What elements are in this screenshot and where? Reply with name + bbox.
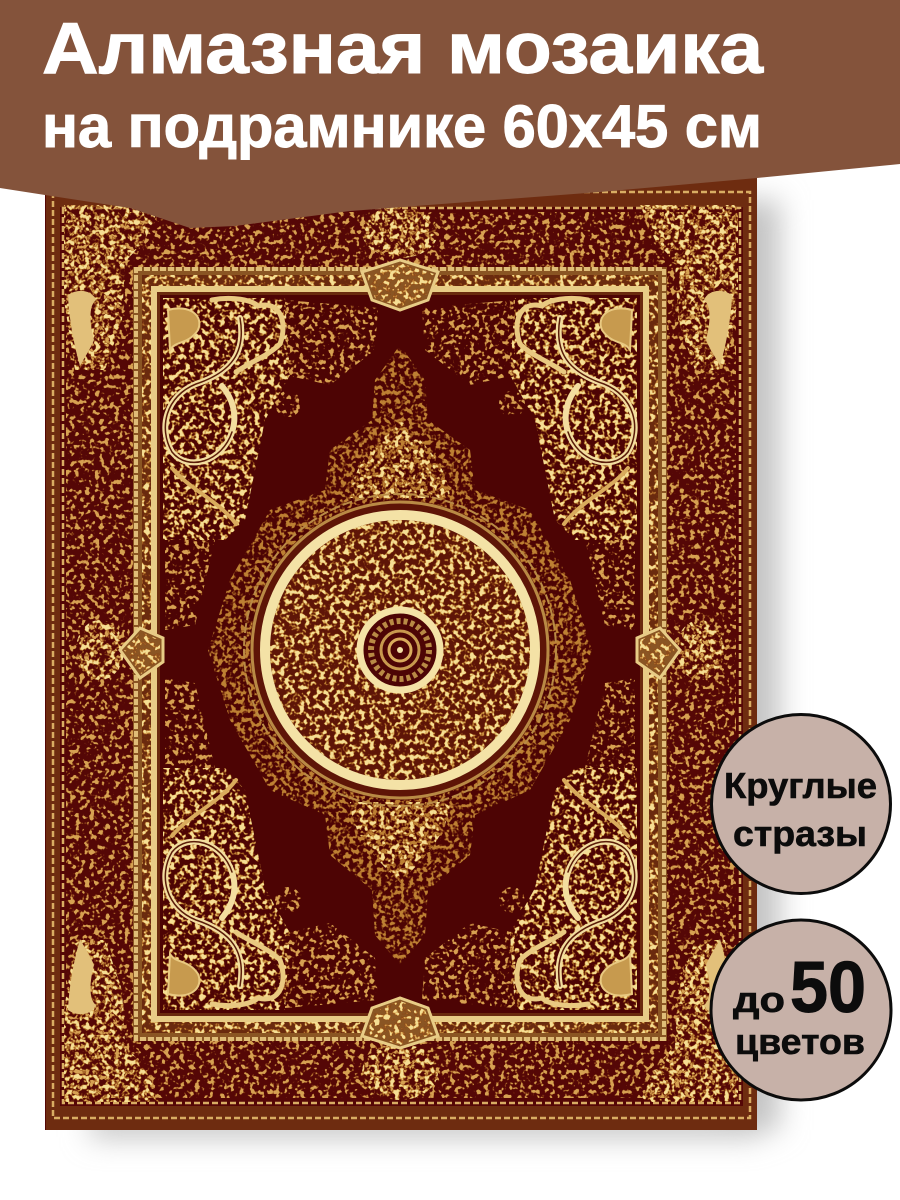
canvas: carpet artwork [45,135,757,1130]
badge: round rhinestones [712,714,890,894]
title [42,9,764,160]
frame cartouches [120,260,680,1048]
badge: round rhinestones: Круглые [724,765,877,806]
central medallion [208,345,592,965]
outer rings [244,494,556,806]
medallion outer foliage [208,345,592,965]
medallion interior pattern [270,520,530,780]
canvas shadow [90,200,780,1138]
medallion disc [250,500,550,800]
badge: up to 50 colours: 50 [790,948,866,1028]
carpet base [45,135,757,1130]
border floral pattern [66,212,736,1098]
corner scrolls [165,298,635,1006]
inner field corner blocks [163,298,637,1010]
inner cream ring [360,610,440,690]
title line 2: на подрамнике 60х45 см [42,93,762,160]
title line 1: Алмазная мозаика [42,9,764,89]
bright border accents [68,291,732,1014]
crown bottom [350,802,450,882]
frame pattern [142,275,658,1033]
outer border stripes [46,178,757,1130]
center rosette [371,621,429,679]
badge: up to 50 colours: до [733,979,785,1020]
header banner [0,0,900,228]
outer border light lines [53,192,750,1118]
badge: up to 50 colours [711,920,891,1100]
corner flora [165,300,635,1008]
border corner ornaments [64,205,738,1102]
inner frame [133,267,667,1041]
badge: up to 50 colours: цветов [735,1021,865,1062]
badge: round rhinestones: стразы [733,813,867,854]
cream ring [265,515,535,785]
crown top [350,420,450,498]
